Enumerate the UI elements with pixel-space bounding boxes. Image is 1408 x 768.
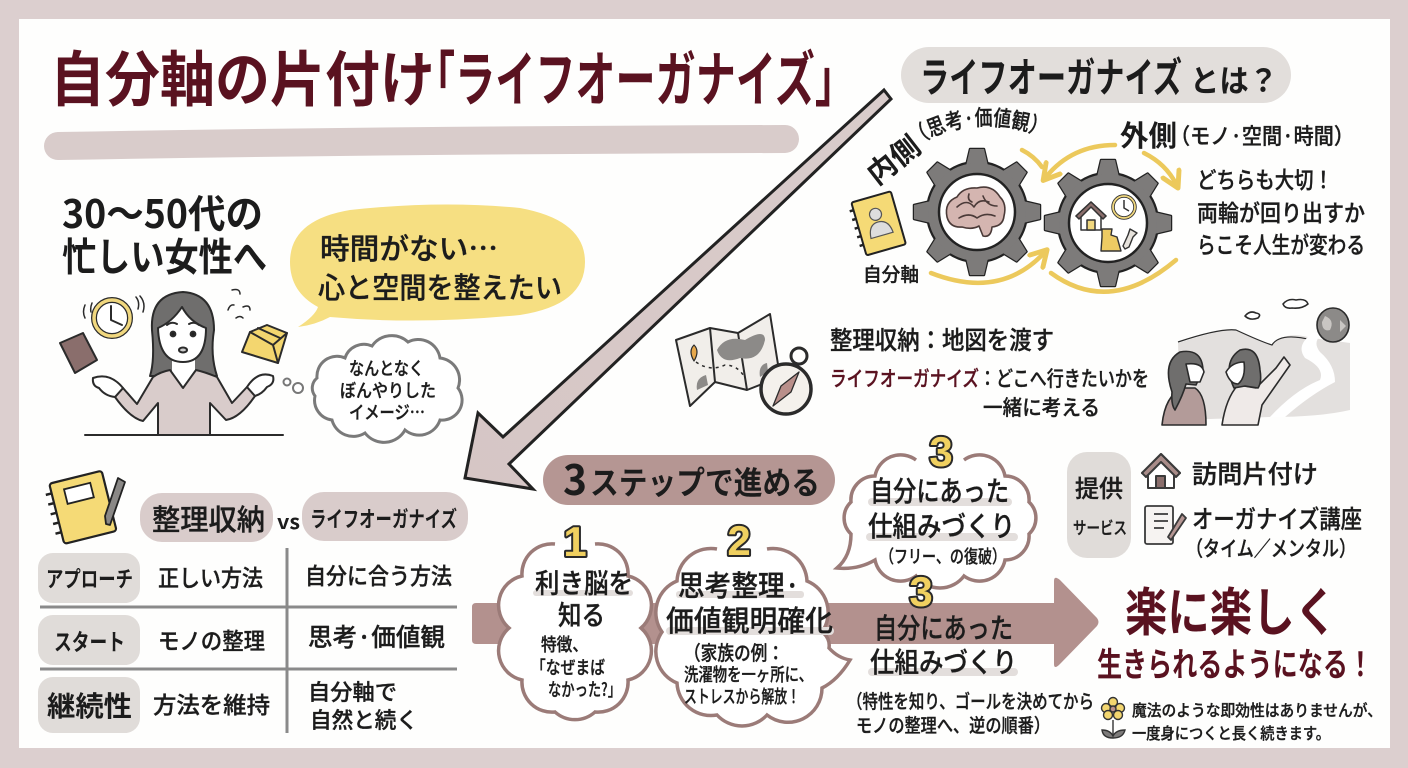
step 1 cloud: 利き脳を <box>535 562 633 601</box>
gear: outer with things <box>1045 160 1171 286</box>
icon: house service <box>1142 454 1180 488</box>
text: both matter <box>1197 161 1365 260</box>
step 3 on arrow: 自分にあった <box>874 607 1013 647</box>
flow arrow <box>472 578 1098 667</box>
thought cloud: vague image <box>284 336 462 442</box>
gear: inner with brain <box>914 149 1040 275</box>
heading: three steps <box>543 447 835 508</box>
text: organize courses <box>1186 500 1362 563</box>
step 3 on arrow <box>847 568 1094 738</box>
speech bubble: yellow: 心と空間を整えたい <box>318 265 562 307</box>
services label <box>1067 452 1131 558</box>
services label: サービス <box>1073 514 1127 539</box>
icon: notebook and pen <box>43 471 125 545</box>
label: outer side: （モノ·空間·時間） <box>1170 119 1354 151</box>
step 3 on arrow: 仕組みづくり <box>870 641 1017 681</box>
step 3 cloud: 自分にあった <box>870 470 1009 510</box>
step 1 cloud: 1 <box>563 518 587 565</box>
large diagonal arrow <box>465 90 891 489</box>
step 3 cloud <box>837 428 1036 588</box>
vs label: vs <box>277 506 300 535</box>
text: life organize thinks together <box>830 363 1149 422</box>
icon: bottle <box>1101 229 1121 251</box>
step 1 cloud <box>499 518 651 720</box>
step 1 cloud: なかった?」 <box>548 676 621 702</box>
comparison header: organizing: 整理収納 <box>152 497 265 539</box>
row: start <box>38 615 445 665</box>
row: continuity: 自然と続く <box>310 703 418 735</box>
thought cloud: vague image: ぼんやりした <box>340 377 436 403</box>
speech bubble: yellow: 時間がない… <box>320 226 498 268</box>
label: inner side <box>857 106 1037 193</box>
step 3 cloud: 3 <box>929 428 953 475</box>
step 1 cloud: 知る <box>558 594 605 633</box>
title underline brush <box>58 139 785 146</box>
icon: self-axis notebook <box>847 191 906 257</box>
conclusion heading: 楽に楽しく <box>1125 571 1337 646</box>
step 2 cloud: 2 <box>727 517 751 564</box>
heading: three steps: ステップで進める <box>590 458 820 504</box>
note text: 魔法のような即効性はありませんが、 <box>1132 697 1382 721</box>
title <box>50 32 855 119</box>
comparison header: life organize <box>302 492 468 541</box>
icon: map and compass <box>676 314 811 414</box>
text: both matter: らこそ人生が変わる <box>1197 226 1365 260</box>
step 3 cloud: 仕組みづくり <box>868 505 1015 545</box>
text: life organize thinks together: ：どこへ行きたいかを <box>979 363 1149 393</box>
row: continuity: 継続性 <box>47 685 132 725</box>
row: approach: アプローチ <box>46 562 133 594</box>
note text <box>1132 697 1382 744</box>
text: organize courses: （タイム／メンタル） <box>1186 533 1356 563</box>
step 3 cloud: （フリー、の復破） <box>880 543 1006 569</box>
text: both matter: 両輪が回り出すか <box>1197 194 1365 228</box>
text: organize courses: オーガナイズ講座 <box>1192 500 1362 536</box>
label: outer side: 外側 <box>1120 113 1177 155</box>
comparison table <box>38 548 457 735</box>
step 2 cloud: 思考整理· <box>678 563 800 605</box>
step 2 cloud: 価値観明確化 <box>666 598 833 640</box>
label: inner side: 内側 <box>857 124 928 193</box>
step 1 cloud: 特徴、 <box>541 631 588 657</box>
icon: flower <box>1102 698 1125 738</box>
heading: target audience: 30～50代の <box>62 184 263 240</box>
row: approach: 正しい方法 <box>158 559 263 593</box>
step 3 on arrow: モノの整理へ、逆の順番） <box>856 711 1050 738</box>
illustration: busy woman <box>60 290 287 435</box>
row: approach: 自分に合う方法 <box>305 557 452 591</box>
row: start: 思考·価値観 <box>308 618 445 654</box>
label: self axis: 自分軸 <box>863 260 919 287</box>
rotation arrows <box>931 145 1176 292</box>
text: life organize thinks together: ライフオーガナイズ <box>830 363 979 393</box>
row: approach <box>38 553 452 603</box>
title: 自分軸の片付け <box>50 32 435 119</box>
section heading: what is life organize: とは？ <box>1190 56 1278 101</box>
row: start: モノの整理 <box>158 622 265 656</box>
text: organizing gives a map: 整理収納：地図を渡す <box>830 321 1054 357</box>
step 2 cloud: 洗濯物を一ヶ所に、 <box>684 661 813 687</box>
heading: target audience: 忙しい女性へ <box>62 227 267 283</box>
icon: clock <box>1113 196 1135 218</box>
text: both matter: どちらも大切！ <box>1197 161 1333 195</box>
icon: tool <box>1123 229 1137 249</box>
heading: target audience <box>62 184 267 283</box>
row: continuity: 方法を維持 <box>153 686 270 720</box>
text: home visit tidying: 訪問片付け <box>1192 455 1318 491</box>
step 2 cloud: （家族の例： <box>684 637 784 666</box>
label: inner side: （思考·価値観） <box>919 106 1037 140</box>
services label: 提供 <box>1075 469 1123 504</box>
note text: 一度身につくと長く続きます。 <box>1132 720 1330 744</box>
icon: brain <box>946 187 1005 236</box>
step 1 cloud: 「なぜまば <box>531 654 605 680</box>
step 3 on arrow: 3 <box>909 568 933 615</box>
label: outer side <box>1120 113 1354 155</box>
heading: three steps: 3 <box>563 447 587 508</box>
thought cloud: vague image: なんとなく <box>349 355 424 381</box>
row: continuity: 自分軸で <box>308 675 397 707</box>
icon: house <box>1076 202 1106 230</box>
illustration: two people looking at landscape <box>1162 300 1350 425</box>
step 3 on arrow: （特性を知り、ゴールを決めてから <box>847 687 1094 714</box>
thought cloud: vague image: イメージ… <box>349 399 425 425</box>
comparison header: life organize: ライフオーガナイズ <box>310 502 457 534</box>
text: life organize thinks together: 一緒に考える <box>983 392 1100 422</box>
conclusion heading <box>1097 571 1373 686</box>
section heading: what is life organize: ライフオーガナイズ <box>920 44 1182 104</box>
row: continuity <box>38 675 418 735</box>
row: start: スタート <box>54 623 125 657</box>
speech bubble: yellow <box>290 204 585 327</box>
step 2 cloud: ストレスから解放！ <box>684 683 800 709</box>
icon: notebook service <box>1145 506 1186 544</box>
title: 「ライフオーガナイズ」 <box>415 32 855 119</box>
step 2 cloud <box>656 517 850 726</box>
